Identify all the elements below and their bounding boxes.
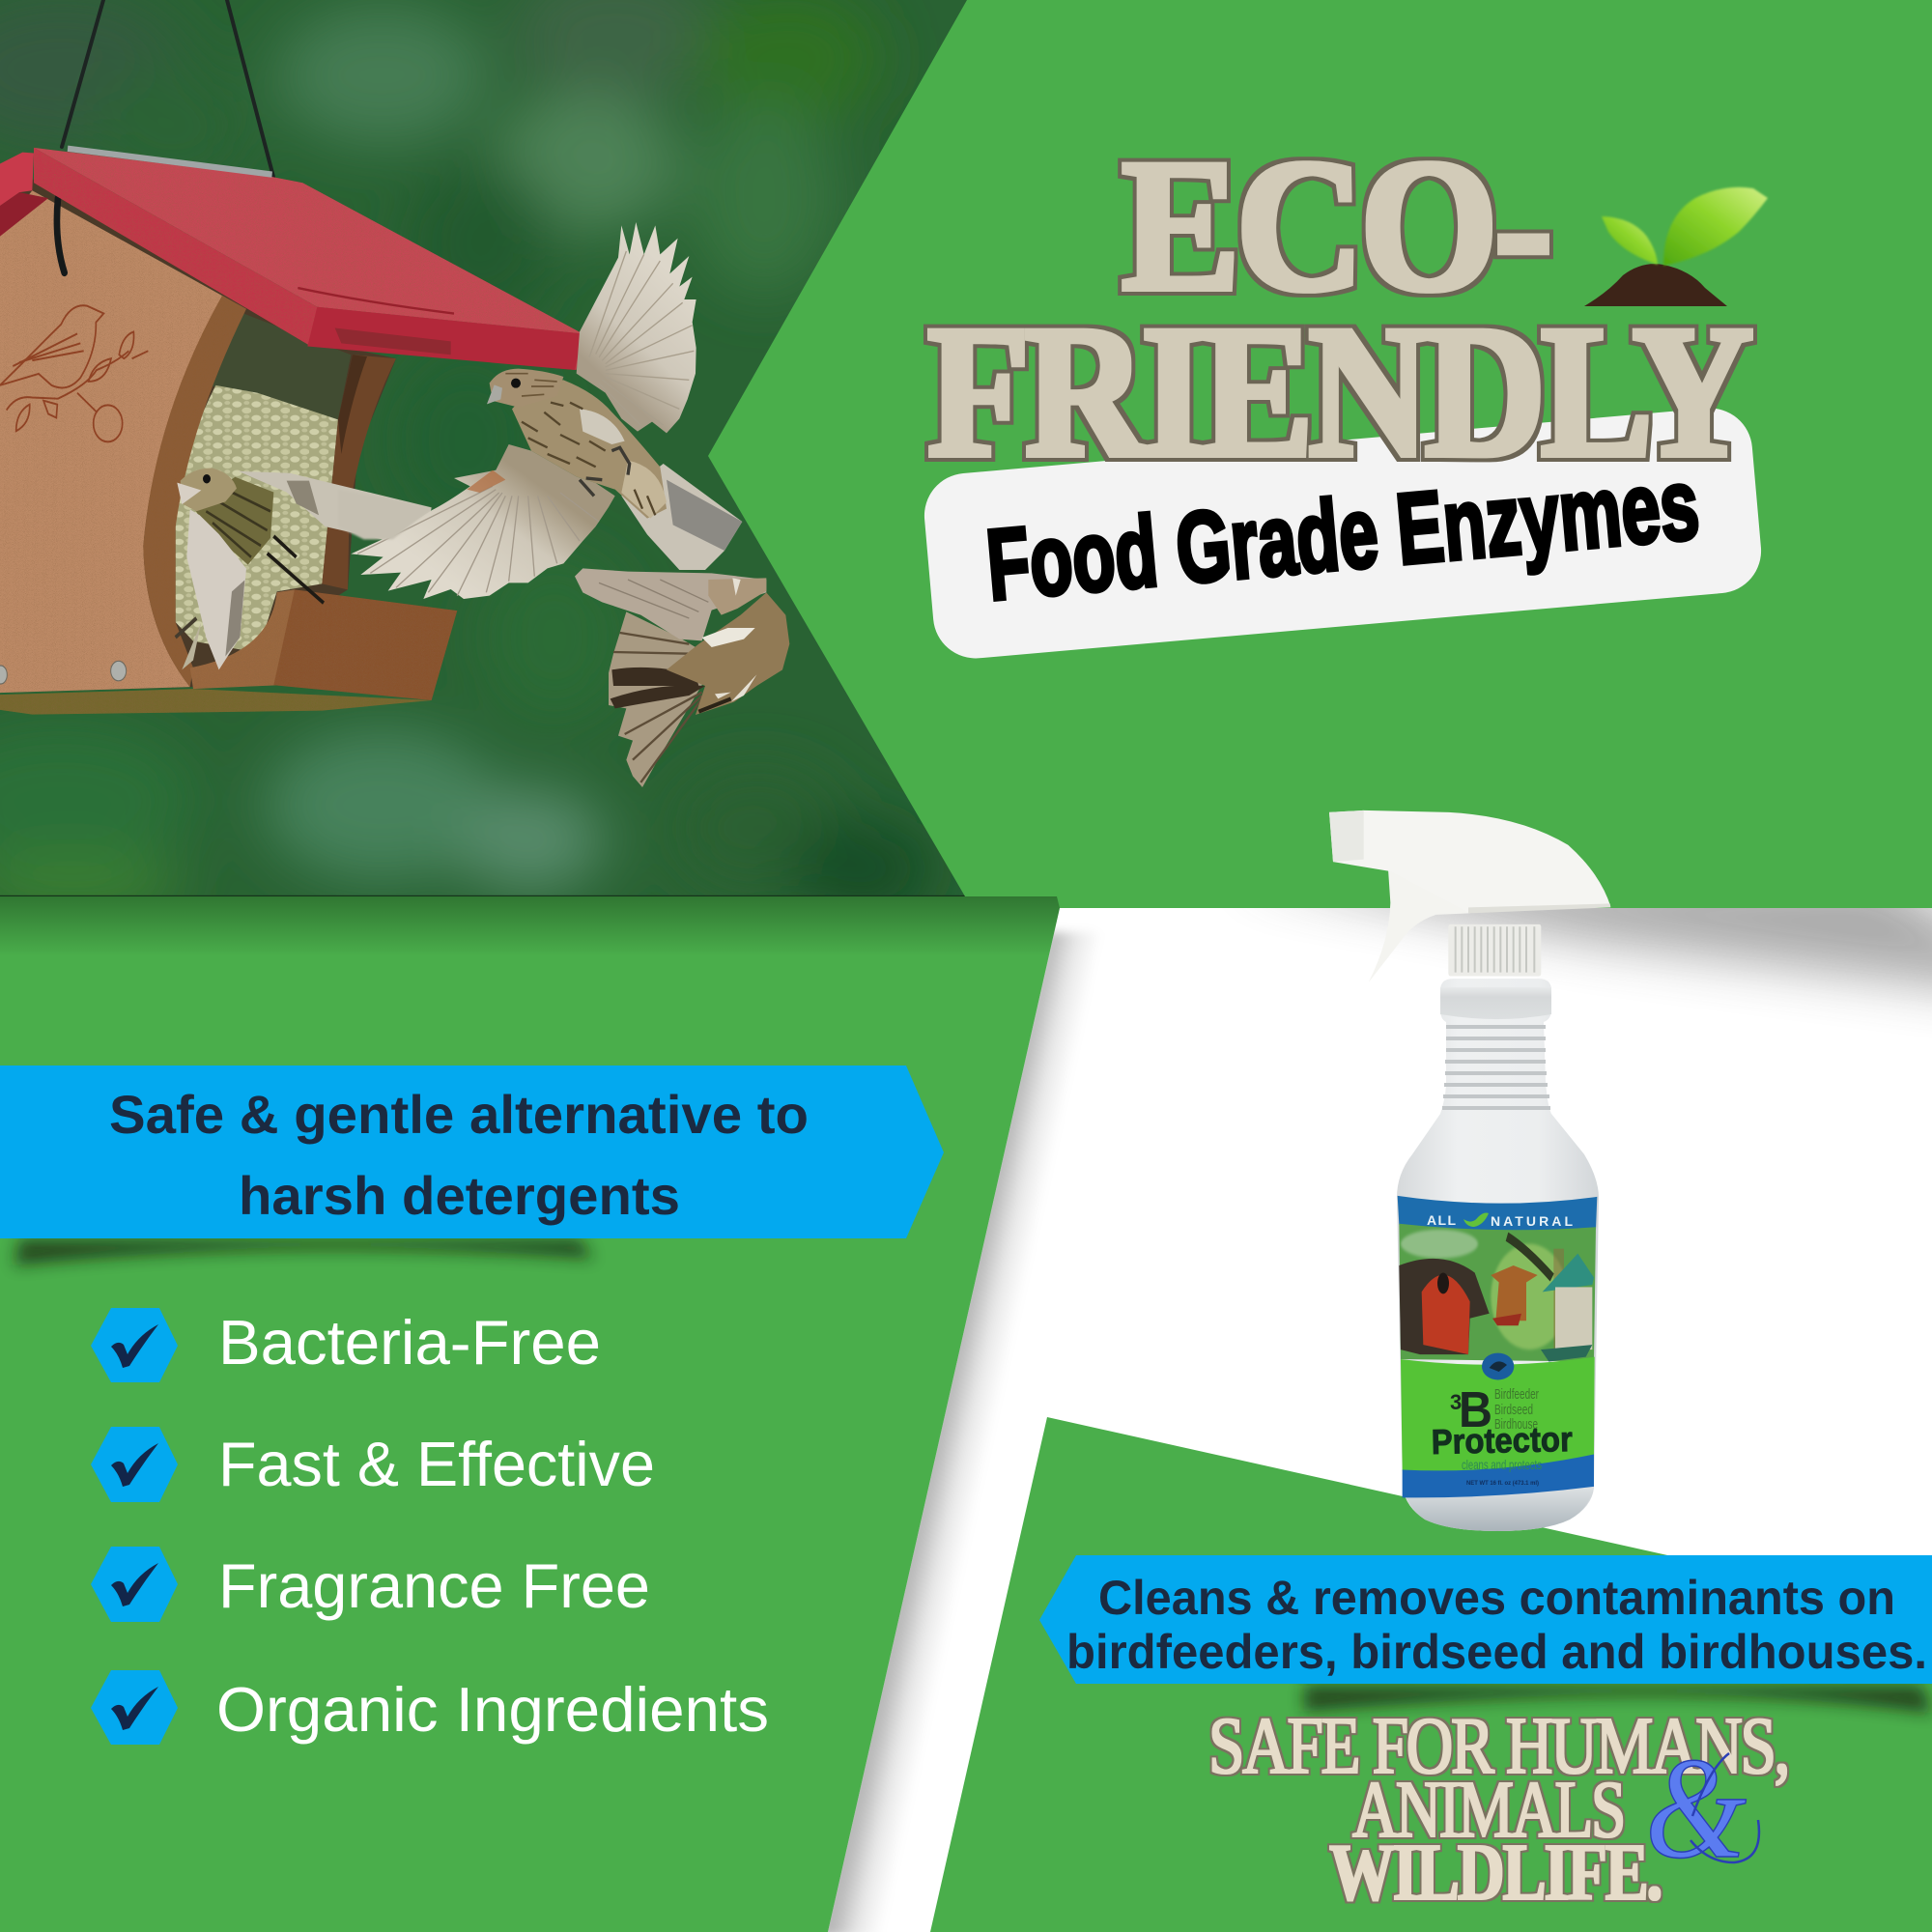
item: Fast and Effective: Fast & Effective (218, 1429, 655, 1499)
label text: Birdseed (1494, 1402, 1533, 1418)
bottle base shade (1403, 1483, 1594, 1531)
bottle neck band (1440, 987, 1551, 1019)
banner: safe and gentle alternative: harsh detergents (239, 1165, 680, 1226)
feeder body panel (0, 190, 225, 693)
feeder right post (322, 355, 396, 589)
ampersand flourish: & (1645, 1728, 1747, 1889)
label text: NET WT 16 fl. oz (473.1 ml) (1466, 1481, 1539, 1487)
bird feeder photo (0, 0, 985, 921)
heading: safe for humans, animals and wildlife (1208, 1701, 1788, 1918)
banner: cleans and removes contaminants (1039, 1555, 1932, 1714)
product: spray bottle (1329, 810, 1610, 1531)
item: Fragrance Free: Fragrance Free (218, 1550, 650, 1621)
feeder roof (0, 148, 582, 370)
shadow under photo (0, 896, 1063, 956)
banner: safe and gentle alternative (0, 1065, 944, 1265)
item: Organic Ingredients: Organic Ingredients (216, 1674, 769, 1745)
label text: 3 (1450, 1390, 1462, 1414)
panel: white product area (828, 908, 1932, 1932)
label text: ALL (1427, 1212, 1456, 1228)
checklist (91, 1307, 769, 1745)
icon: sprout (1584, 187, 1768, 306)
banner: safe and gentle alternative: Safe & gentle alternative to (109, 1084, 809, 1145)
label green and blue bands (1401, 1357, 1595, 1471)
bottle cap collar (1448, 924, 1541, 977)
bottle label (1398, 1196, 1597, 1497)
heading: safe for humans, animals and wildlife: ANIMALS (1352, 1765, 1624, 1855)
label text: B (1459, 1382, 1492, 1438)
bird: centre in flight (338, 222, 742, 599)
label text (1427, 1212, 1573, 1487)
heading: safe for humans, animals and wildlife: SAFE FOR HUMANS, (1208, 1701, 1788, 1791)
feeder screws (0, 661, 127, 684)
label feeder (1491, 1265, 1538, 1321)
item: Bacteria-Free (91, 1307, 601, 1382)
label text: Birdhouse (1494, 1416, 1538, 1433)
banner: cleans and removes contaminants: Cleans & removes contaminants on (1098, 1571, 1895, 1625)
green panel: lower right (930, 1417, 1932, 1932)
hanging wires (62, 0, 273, 177)
heading: safe for humans, animals and wildlife: WILDLIFE. (1329, 1828, 1661, 1918)
feeder window and seeds (210, 313, 351, 419)
label text: Birdfeeder (1494, 1386, 1539, 1403)
bottle neck ribs (1442, 1027, 1550, 1108)
title: Eco: ECO- (1122, 121, 1548, 330)
bird: at the feeder (176, 469, 432, 669)
feeder hook (57, 198, 65, 272)
bird: lower right in flight (575, 568, 789, 787)
green panel: top right (708, 0, 1932, 908)
feeder arch (143, 296, 246, 687)
shadow on white area (802, 874, 1932, 1932)
label text: NATURAL (1491, 1213, 1573, 1229)
callout: Food Grade Enzymes (921, 405, 1765, 662)
label birdhouse (1399, 1259, 1490, 1354)
feeder hinge (68, 149, 272, 175)
item: Bacteria-Free: Bacteria-Free (218, 1307, 601, 1378)
feeder tray (0, 589, 457, 715)
green panel: lower left (0, 896, 1060, 1932)
title: Friendly: FRIENDLY (927, 287, 1750, 497)
label hanging feeder (1543, 1254, 1594, 1292)
banner: cleans and removes contaminants: birdfeeders, birdseed and birdhouses. (1066, 1625, 1927, 1679)
sprayer head (1329, 810, 1610, 982)
feeder dark interior (0, 179, 396, 693)
label text: Protector (1431, 1419, 1573, 1462)
feeder (0, 148, 582, 715)
label text: cleans and protects (1462, 1457, 1542, 1472)
feeder engraving (0, 305, 148, 441)
bottle body (1397, 979, 1599, 1531)
